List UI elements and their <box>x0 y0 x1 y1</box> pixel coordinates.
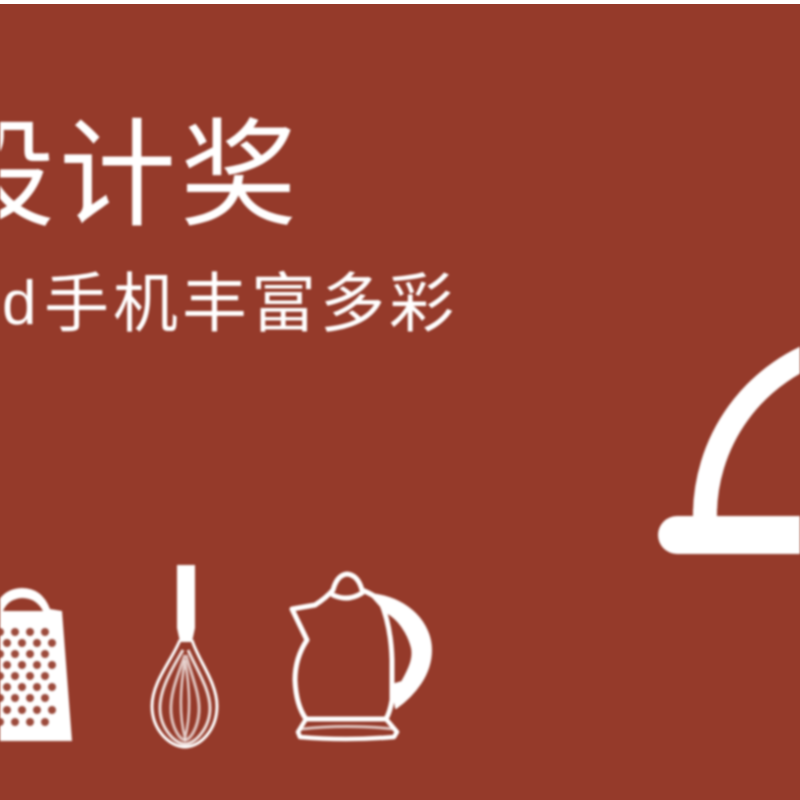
subtitle: d <box>2 269 36 338</box>
subtitle: 手机丰富多彩 <box>44 267 458 340</box>
